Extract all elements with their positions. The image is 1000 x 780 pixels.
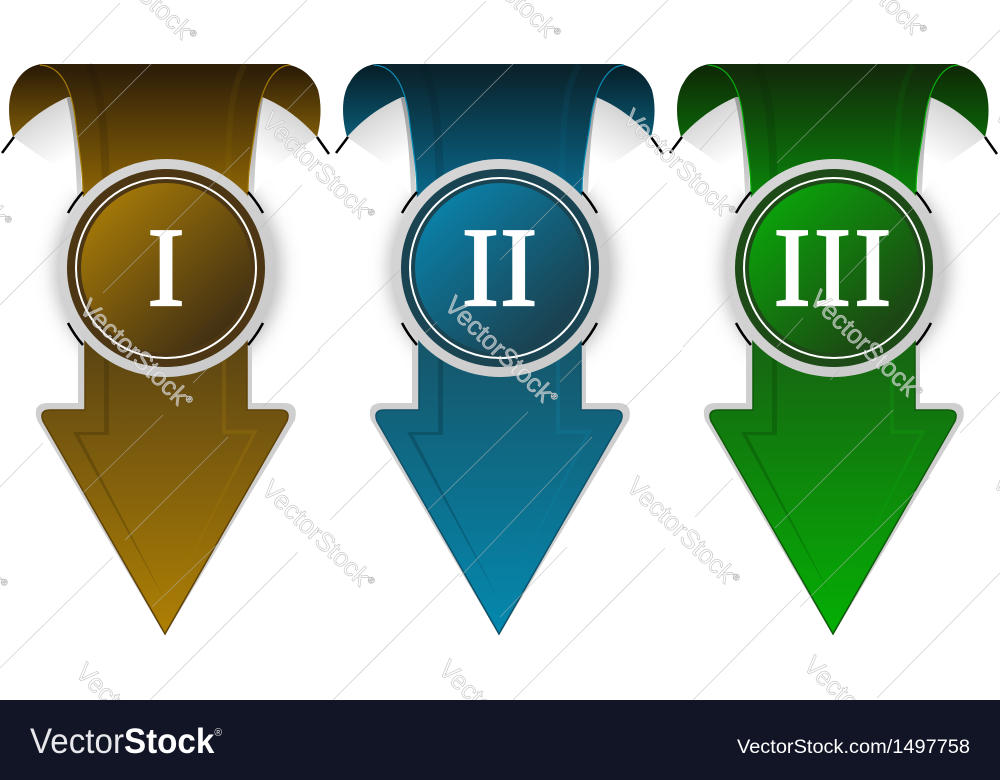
watermark text: ®	[913, 384, 925, 396]
watermark text: VectorStock	[621, 471, 741, 589]
watermark text: VectorStock	[74, 293, 194, 411]
numeral I: I	[147, 206, 185, 330]
watermark text: VectorStock	[617, 103, 737, 221]
badge shadow	[55, 157, 281, 383]
watermark text: VectorStock	[433, 654, 553, 772]
badge	[57, 159, 275, 377]
ribbon accent edges	[374, 65, 624, 192]
watermark text: VectorStock	[798, 650, 918, 768]
watermark text: ®	[183, 393, 195, 405]
watermark text: ®	[542, 754, 554, 766]
arrow I (gold)	[2, 64, 329, 634]
watermark text: VectorStock	[439, 290, 559, 408]
badge ticks	[402, 192, 597, 345]
watermark text: ®	[187, 27, 199, 39]
badge	[391, 159, 609, 377]
watermark text: ®	[726, 203, 738, 215]
ribbon front	[40, 64, 290, 205]
ribbon fold stripes	[422, 65, 440, 195]
curl side ticks	[670, 137, 997, 154]
footer logo: VectorStock	[30, 722, 219, 761]
curl shadow right	[918, 97, 985, 200]
curl shadow right	[584, 97, 651, 200]
ribbon back curls	[9, 64, 321, 137]
ribbon accent edges	[40, 65, 290, 192]
badge shadow	[723, 157, 949, 383]
watermark text: ®	[907, 750, 919, 762]
watermark text: ®	[917, 22, 929, 34]
curl shadow left	[13, 97, 80, 200]
arrow grey outline	[704, 340, 964, 632]
ribbon accent edges	[708, 65, 958, 192]
arrow head	[376, 340, 622, 634]
curl shadow left	[347, 97, 414, 200]
watermark text: VectorStock	[70, 657, 190, 775]
ribbon back curls	[343, 64, 655, 137]
ribbon fold stripes	[756, 65, 774, 195]
curl shadow right	[250, 97, 317, 200]
ribbon back curls	[677, 64, 989, 137]
badge ticks	[68, 192, 263, 345]
ribbon front	[374, 64, 624, 205]
watermark text: ®	[551, 25, 563, 37]
footer logo: ®	[214, 727, 222, 739]
watermark text: ®	[365, 574, 377, 586]
ribbon edge shadows	[737, 97, 929, 215]
arrow head	[42, 340, 288, 634]
watermark text: ®	[730, 571, 742, 583]
badge ticks	[736, 192, 931, 345]
curl side ticks	[336, 137, 663, 154]
arrow inner fold lines	[73, 345, 165, 600]
badge shadow	[389, 157, 615, 383]
arrow grey outline	[370, 340, 630, 632]
numeral III: III	[774, 206, 894, 330]
arrow grey outline	[36, 340, 296, 632]
ribbon fold stripes	[88, 65, 106, 195]
watermark text: ®	[365, 206, 377, 218]
watermark text: ®	[2, 213, 14, 225]
arrow head	[710, 340, 956, 634]
numeral II: II	[462, 206, 538, 330]
ribbon front	[708, 64, 958, 205]
footer image id: VectorStock.com/1497758	[737, 737, 970, 758]
ribbon edge shadows	[403, 97, 595, 215]
watermark text: ®	[179, 757, 191, 769]
watermark text: VectorStock	[804, 284, 924, 402]
arrow inner fold lines	[741, 345, 833, 600]
watermark text: VectorStock	[256, 106, 376, 224]
footer bar	[0, 700, 1000, 780]
badge	[725, 159, 943, 377]
arrow inner fold lines	[407, 345, 499, 600]
arrow III (green)	[670, 64, 997, 634]
watermark text: ®	[548, 390, 560, 402]
ribbon edge shadows	[69, 97, 261, 215]
curl shadow left	[681, 97, 748, 200]
watermark text: VectorStock	[256, 474, 376, 592]
arrow II (blue)	[336, 64, 663, 634]
curl side ticks	[2, 137, 329, 154]
